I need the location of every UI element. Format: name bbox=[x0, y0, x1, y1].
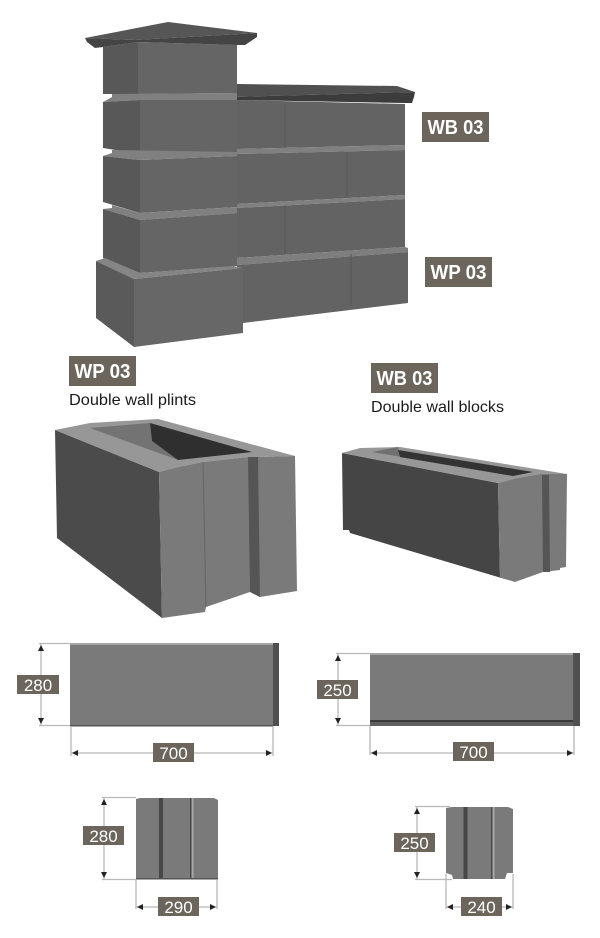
dimension label: 280: 280 bbox=[24, 676, 52, 695]
label: WB 03: WB 03 bbox=[428, 117, 484, 139]
dimension drawing: block end view bbox=[394, 806, 513, 917]
label: WB 03 blocks: WB 03 bbox=[376, 368, 432, 390]
caption: double wall blocks: Double wall blocks bbox=[371, 399, 504, 416]
dimension label: 290: 290 bbox=[164, 898, 193, 917]
dimension label: 700 bbox=[153, 743, 194, 763]
double wall plint 3D bbox=[55, 419, 297, 618]
label: WP 03: WP 03 bbox=[430, 262, 486, 284]
dimension drawing: plint end view bbox=[83, 798, 218, 917]
dimension label: 250: 250 bbox=[323, 681, 352, 700]
dimension drawing: block side view bbox=[317, 653, 580, 762]
dimension label: 240: 240 bbox=[467, 898, 496, 917]
pillar block 3 bbox=[103, 150, 237, 213]
pillar and wall illustration bbox=[85, 22, 415, 347]
label: WP 03 plints: WP 03 bbox=[74, 361, 130, 383]
pillar block 1 bbox=[103, 42, 237, 94]
plinth bbox=[96, 258, 243, 347]
dimension drawing: plint side view bbox=[17, 643, 279, 763]
dimension label: 700 bbox=[453, 742, 494, 762]
pillar block 2 bbox=[103, 93, 237, 154]
wall coping bbox=[230, 84, 415, 103]
caption: double wall plints: Double wall plints bbox=[69, 392, 196, 409]
label: WB 03 blocks bbox=[371, 363, 438, 393]
dimension label: 700: 700 bbox=[159, 744, 188, 763]
dimension label: 280 bbox=[17, 675, 59, 695]
double wall block 3D bbox=[342, 447, 567, 582]
label: WP 03 bbox=[425, 257, 492, 287]
dimension label: 700: 700 bbox=[459, 743, 488, 762]
label: WP 03 plints bbox=[69, 356, 136, 386]
dimension label: 250 bbox=[317, 680, 358, 700]
pillar cap bbox=[85, 22, 257, 48]
dimension label: 250: 250 bbox=[400, 834, 429, 853]
label: WB 03 bbox=[422, 112, 489, 142]
wall courses bbox=[237, 100, 408, 323]
dimension label: 280: 280 bbox=[89, 827, 118, 846]
pillar block 4 bbox=[103, 205, 237, 273]
